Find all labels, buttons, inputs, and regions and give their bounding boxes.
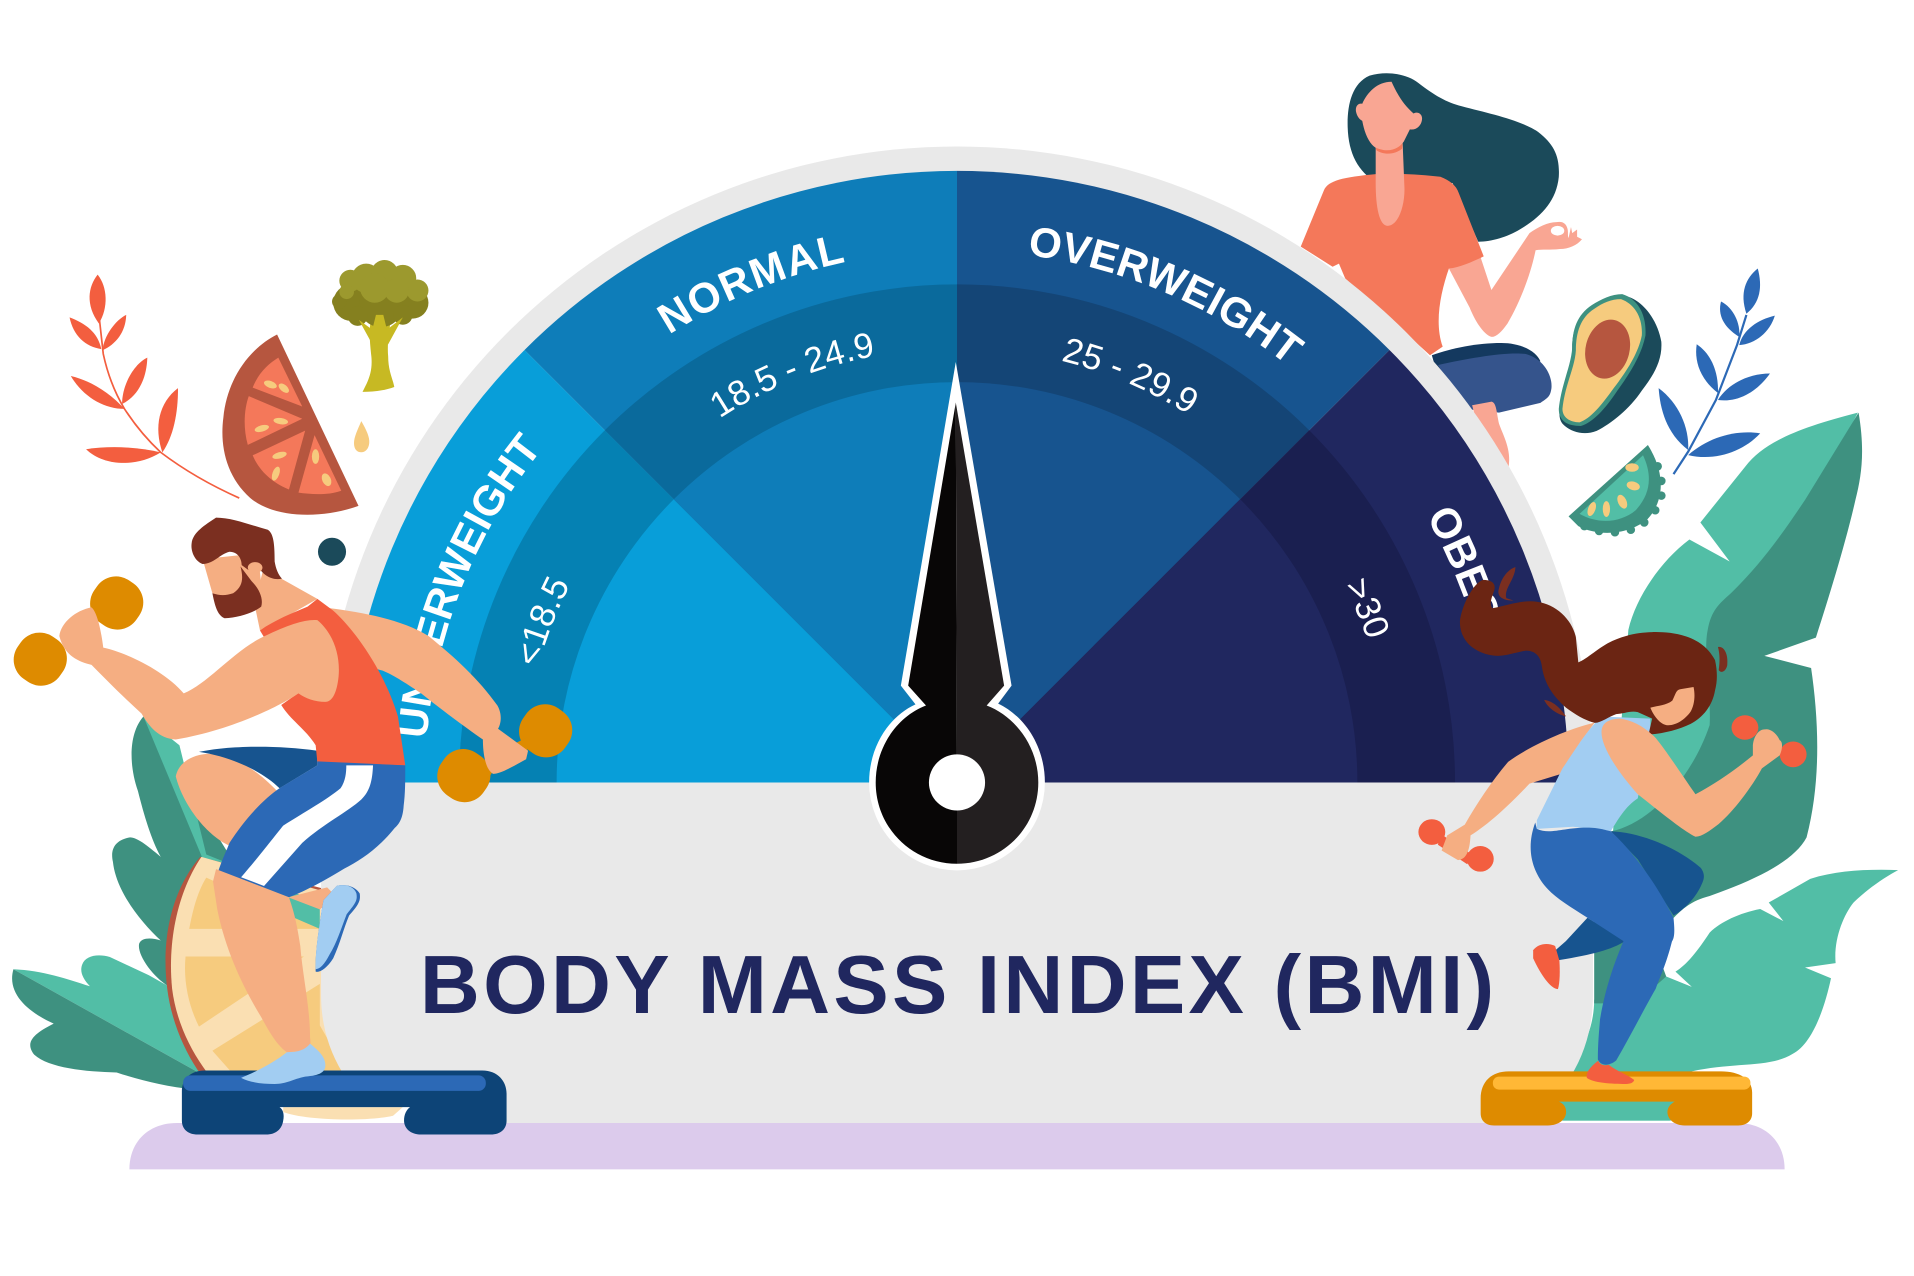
- rear thigh: [176, 754, 277, 846]
- figure: meditating woman: [1301, 73, 1582, 470]
- icon: broccoli: [332, 260, 428, 392]
- label: normal: NORMAL: [656, 238, 844, 334]
- orange slice behind the man: [165, 857, 366, 1105]
- rear foot: [1533, 944, 1560, 989]
- folded legs: [1432, 343, 1552, 470]
- front foot: [1587, 1061, 1634, 1084]
- title: BODY MASS INDEX (BMI): [420, 938, 1494, 1031]
- normal sector: [525, 171, 957, 782]
- dumbbell: right lower: [428, 740, 500, 811]
- rear thigh: [1611, 831, 1704, 915]
- obese sector: [957, 350, 1569, 782]
- tank top: [1537, 717, 1650, 831]
- shorts: [218, 761, 405, 897]
- leggings: [1531, 822, 1674, 1065]
- dumbbell: left high: [81, 567, 152, 639]
- near arm: [59, 607, 339, 739]
- range: under 18.5: <18.5: [523, 576, 568, 664]
- far arm: [1442, 723, 1595, 860]
- icon: tomato slice: [222, 334, 359, 515]
- teal leaf strip over the slice: [275, 887, 320, 929]
- range: 25 to 29.9: 25 - 29.9: [1062, 338, 1197, 411]
- arm: [1449, 222, 1582, 337]
- dumbbell: upper right: [1732, 715, 1807, 767]
- icon: dark dot: [318, 538, 346, 566]
- gauge needle: [869, 362, 1045, 870]
- gauge: body and title plate: [321, 782, 1593, 1123]
- neck: [1376, 140, 1404, 226]
- rear calf: [288, 887, 337, 909]
- icon: blue sprig: [1659, 269, 1775, 474]
- gauge: coloured dial: [345, 171, 1569, 782]
- figure: man with dumbbells: [5, 518, 581, 1084]
- hair: [191, 518, 282, 579]
- icon: orange herb sprig: [70, 275, 239, 498]
- face: [1356, 82, 1422, 150]
- label: obese: OBESE: [1432, 508, 1498, 608]
- front leg: [213, 869, 310, 1052]
- range: 18.5 to 24.9: 18.5 - 24.9: [712, 333, 872, 418]
- hair: [1460, 580, 1717, 735]
- ear: [248, 562, 262, 573]
- step platform: blue: [182, 1071, 507, 1134]
- icon: oil drop: [354, 421, 369, 452]
- rear calf: [1552, 918, 1625, 960]
- lifted shoe: [316, 885, 360, 972]
- label: underweight: UNDERWEIGHT: [400, 431, 536, 736]
- overweight sector: [957, 171, 1389, 782]
- shirt: [1301, 174, 1484, 355]
- hair bits: [1498, 567, 1727, 717]
- dumbbell: lower left: [1418, 819, 1494, 872]
- gauge: outer grey rim: [321, 146, 1593, 782]
- plant: right leaves: [1562, 413, 1898, 1121]
- range: over 30: >30: [1348, 578, 1388, 636]
- far arm: [327, 608, 528, 774]
- shorts stripe: [241, 765, 373, 886]
- base platform: [129, 1123, 1785, 1169]
- step platform: orange: [1481, 1071, 1752, 1125]
- label: overweight: OVERWEIGHT: [1030, 228, 1306, 360]
- face: [1650, 687, 1694, 725]
- neck: [255, 572, 317, 630]
- underweight sector: [345, 350, 957, 782]
- hair: [1348, 73, 1559, 242]
- rear shorts: [199, 747, 317, 788]
- face: [203, 555, 262, 601]
- large upper leaf: [1611, 413, 1862, 918]
- icon: green citrus slice: [1569, 445, 1666, 536]
- icon: avocado: [1559, 294, 1661, 433]
- lower leaf: [1562, 870, 1898, 1121]
- dumbbell: left low: [5, 623, 76, 695]
- front shoe: [241, 1044, 325, 1084]
- tank top: [260, 599, 405, 765]
- near arm: [1602, 719, 1782, 837]
- plant: left leaves: [12, 717, 320, 1090]
- figure: woman with dumbbells: [1418, 567, 1807, 1084]
- dumbbell: right outer: [510, 695, 581, 767]
- beard: [212, 566, 262, 618]
